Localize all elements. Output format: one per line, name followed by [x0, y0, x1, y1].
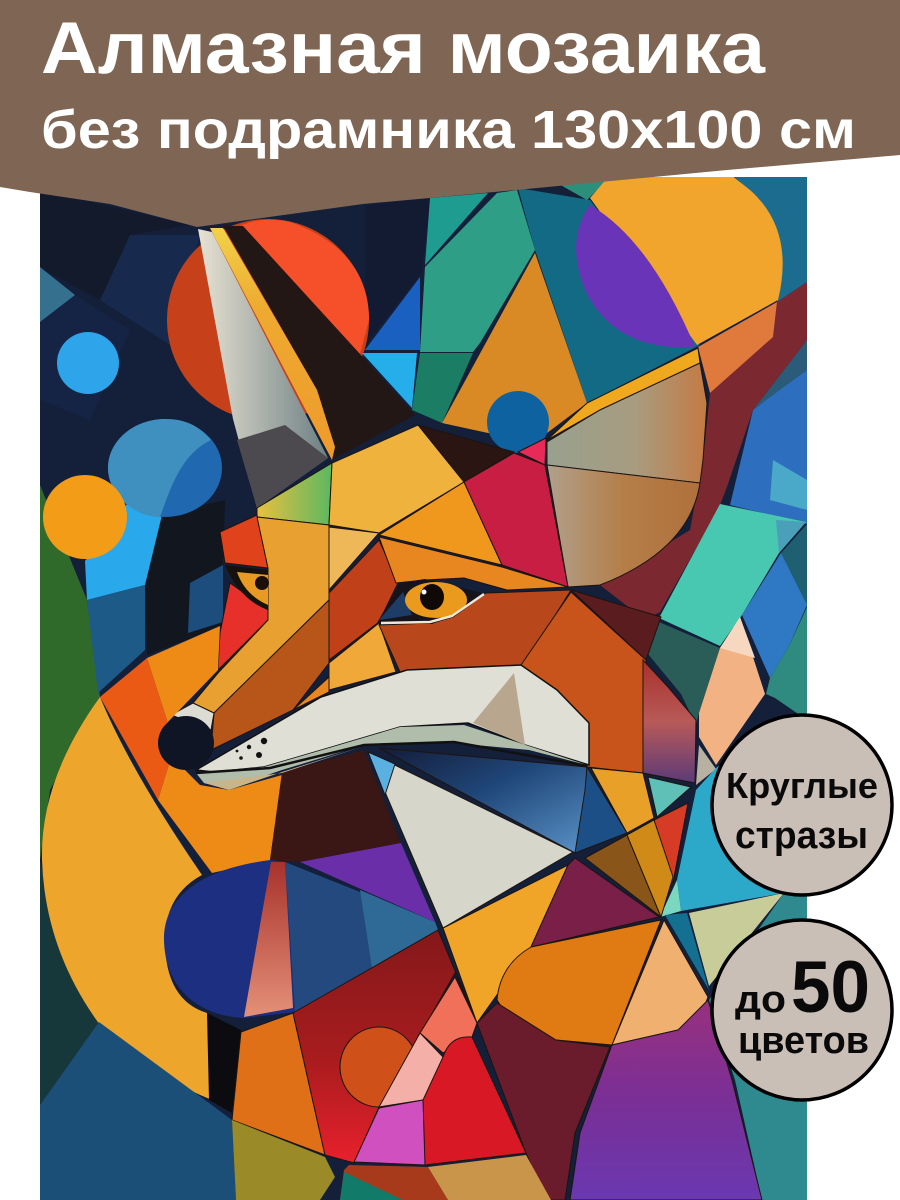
- subtitle: без подрамника 130х100 см: [41, 100, 856, 160]
- fox: left eye: [225, 565, 269, 610]
- fox: snout: [158, 665, 589, 790]
- background: dark sky brush patches: [40, 190, 430, 420]
- background: light blue circle: [57, 332, 119, 394]
- badge: up to 50 colours: до: [735, 979, 786, 1021]
- badge: up to 50 colours: [712, 920, 892, 1100]
- fox: rounded back of head: [518, 348, 707, 587]
- fox: cheek and brow: [379, 537, 696, 783]
- header banner: [0, 0, 900, 227]
- fox: right eye: [377, 579, 484, 624]
- badge: up to 50 colours: цветов: [738, 1020, 869, 1062]
- background: blue circle: [108, 419, 222, 517]
- background: green and teal left edge: [40, 485, 100, 1105]
- badge: round rhinestones: Круглые: [726, 765, 878, 806]
- badge: round rhinestones: [712, 715, 892, 895]
- background: orange circle: [43, 475, 127, 559]
- fox: left side of face: [171, 515, 398, 750]
- background: lower right shapes: [662, 766, 807, 1200]
- fox: neck and chest: [368, 748, 691, 928]
- background: orange circle and purple lens: [576, 170, 783, 347]
- badge: round rhinestones: стразы: [735, 815, 868, 857]
- fox: body and tail: [42, 626, 438, 1113]
- fox: ear: [198, 226, 415, 508]
- background: top right geometry: [362, 170, 807, 433]
- background: small blue circle: [487, 391, 549, 453]
- painting: abstract fox: [40, 170, 807, 1200]
- title: Алмазная мозаика: [41, 8, 767, 89]
- background: left blue shapes: [85, 500, 225, 693]
- fox: bottom edge shapes: [40, 1022, 551, 1200]
- badge: up to 50 colours: 50: [791, 947, 870, 1028]
- background: red circle: [167, 219, 369, 421]
- fox: forehead: [257, 425, 568, 587]
- fox: lower patchwork: [232, 858, 762, 1200]
- background: right side shapes: [600, 282, 807, 785]
